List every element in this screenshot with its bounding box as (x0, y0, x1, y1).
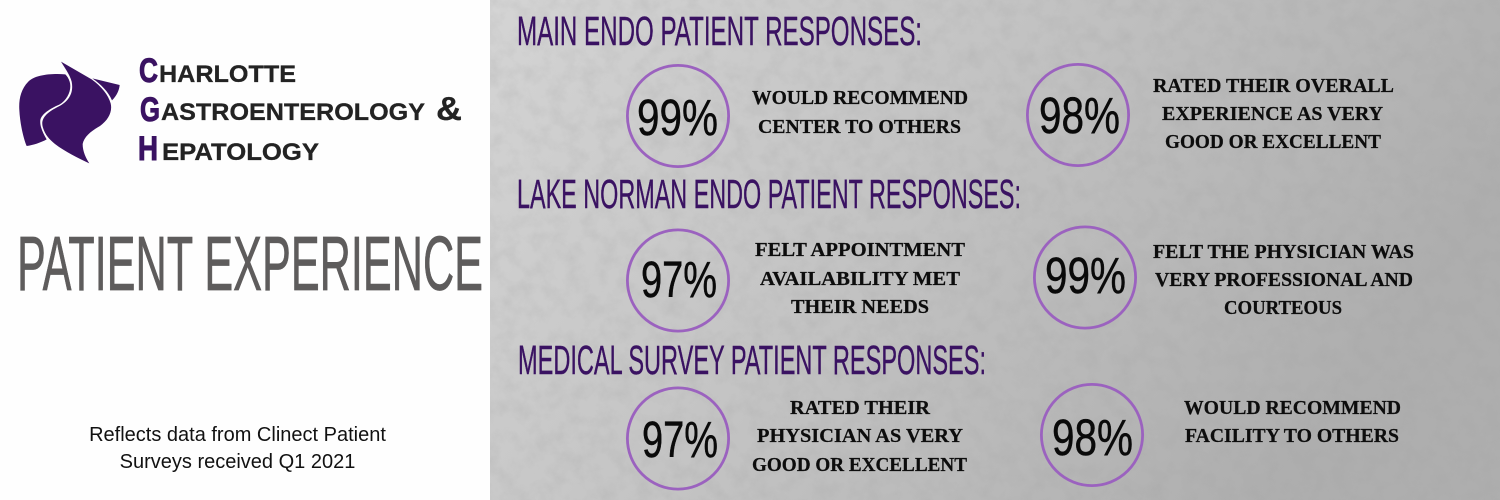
circle with percentage (1034, 227, 1136, 328)
heading: medical survey: MEDICAL SURVEY PATIENT RESPONSES: (518, 337, 986, 383)
stat description: WOULD RECOMMEND (1184, 397, 1401, 419)
logo line: Gastroenterology & (140, 90, 462, 129)
logo line: Hepatology: EPATOLOGY (162, 139, 319, 166)
logo line: Gastroenterology &: & (436, 90, 462, 127)
heading: main endo: MAIN ENDO PATIENT RESPONSES: (517, 8, 922, 54)
circle with percentage: 97% (641, 251, 717, 308)
stat: 98% recommend facility (1041, 384, 1401, 486)
stat: 97% appointment availability (627, 230, 966, 331)
circle with percentage (627, 65, 729, 167)
stat description: THEIR NEEDS (791, 296, 929, 318)
stat description (1153, 241, 1414, 319)
logo line: Charlotte (139, 52, 296, 90)
logo line: Gastroenterology &: G (140, 91, 160, 129)
logo line: Hepatology: H (138, 130, 158, 168)
stat description: FELT APPOINTMENT (755, 239, 966, 261)
stat: 99% physician professional (1034, 227, 1414, 328)
text block: data source note: Surveys received Q1 2021 (120, 451, 355, 473)
stat description: FACILITY TO OTHERS (1185, 425, 1399, 447)
stat description: GOOD OR EXCELLENT (1165, 131, 1382, 153)
logo line: Gastroenterology &: ASTROENTEROLOGY (161, 99, 425, 126)
heading: lake norman endo: LAKE NORMAN ENDO PATIENT RESPONSES: (517, 171, 1021, 217)
circle with percentage (1027, 64, 1129, 166)
stat description (1184, 397, 1401, 447)
stat description (752, 397, 968, 476)
circle with percentage: 98% (1052, 409, 1133, 466)
circle with percentage (627, 230, 729, 331)
stat: 98% overall experience (1027, 64, 1394, 166)
circle with percentage (627, 388, 729, 489)
panel: white left background (0, 0, 490, 500)
stat description: AVAILABILITY MET (760, 268, 961, 290)
title: PATIENT EXPERIENCE (17, 221, 483, 307)
circle with percentage (1041, 384, 1143, 486)
stat description: PHYSICIAN AS VERY (757, 425, 964, 447)
text block: data source note: Reflects data from Clinect Patient (89, 424, 386, 446)
logo line: Charlotte: C (139, 52, 158, 90)
circle with percentage: 99% (637, 89, 718, 146)
stat description: FELT THE PHYSICIAN WAS (1153, 241, 1414, 263)
stat description: RATED THEIR (790, 397, 931, 419)
logo line: Charlotte: HARLOTTE (159, 61, 296, 88)
stat description: VERY PROFESSIONAL AND (1155, 269, 1413, 291)
stat description: WOULD RECOMMEND (752, 87, 968, 109)
panel: concrete texture background (490, 0, 1500, 500)
circle with percentage: 98% (1039, 87, 1120, 144)
stat: 97% rated physician (627, 388, 968, 489)
logo: Charlotte Gastroenterology and Hepatology (19, 52, 462, 168)
logo line: Hepatology (138, 130, 319, 168)
stat description (752, 87, 968, 138)
stat: 99% would recommend center (627, 65, 968, 167)
stat description: RATED THEIR OVERALL (1153, 75, 1394, 97)
stat description: CENTER TO OTHERS (758, 116, 961, 138)
stat description: COURTEOUS (1224, 297, 1342, 319)
circle with percentage: 97% (642, 411, 718, 468)
stat description: GOOD OR EXCELLENT (752, 454, 968, 476)
stat description: EXPERIENCE AS VERY (1162, 103, 1384, 125)
stat description (1153, 75, 1394, 153)
icon: liver logo mark (19, 62, 120, 163)
stat description (755, 239, 966, 318)
circle with percentage: 99% (1045, 247, 1126, 304)
